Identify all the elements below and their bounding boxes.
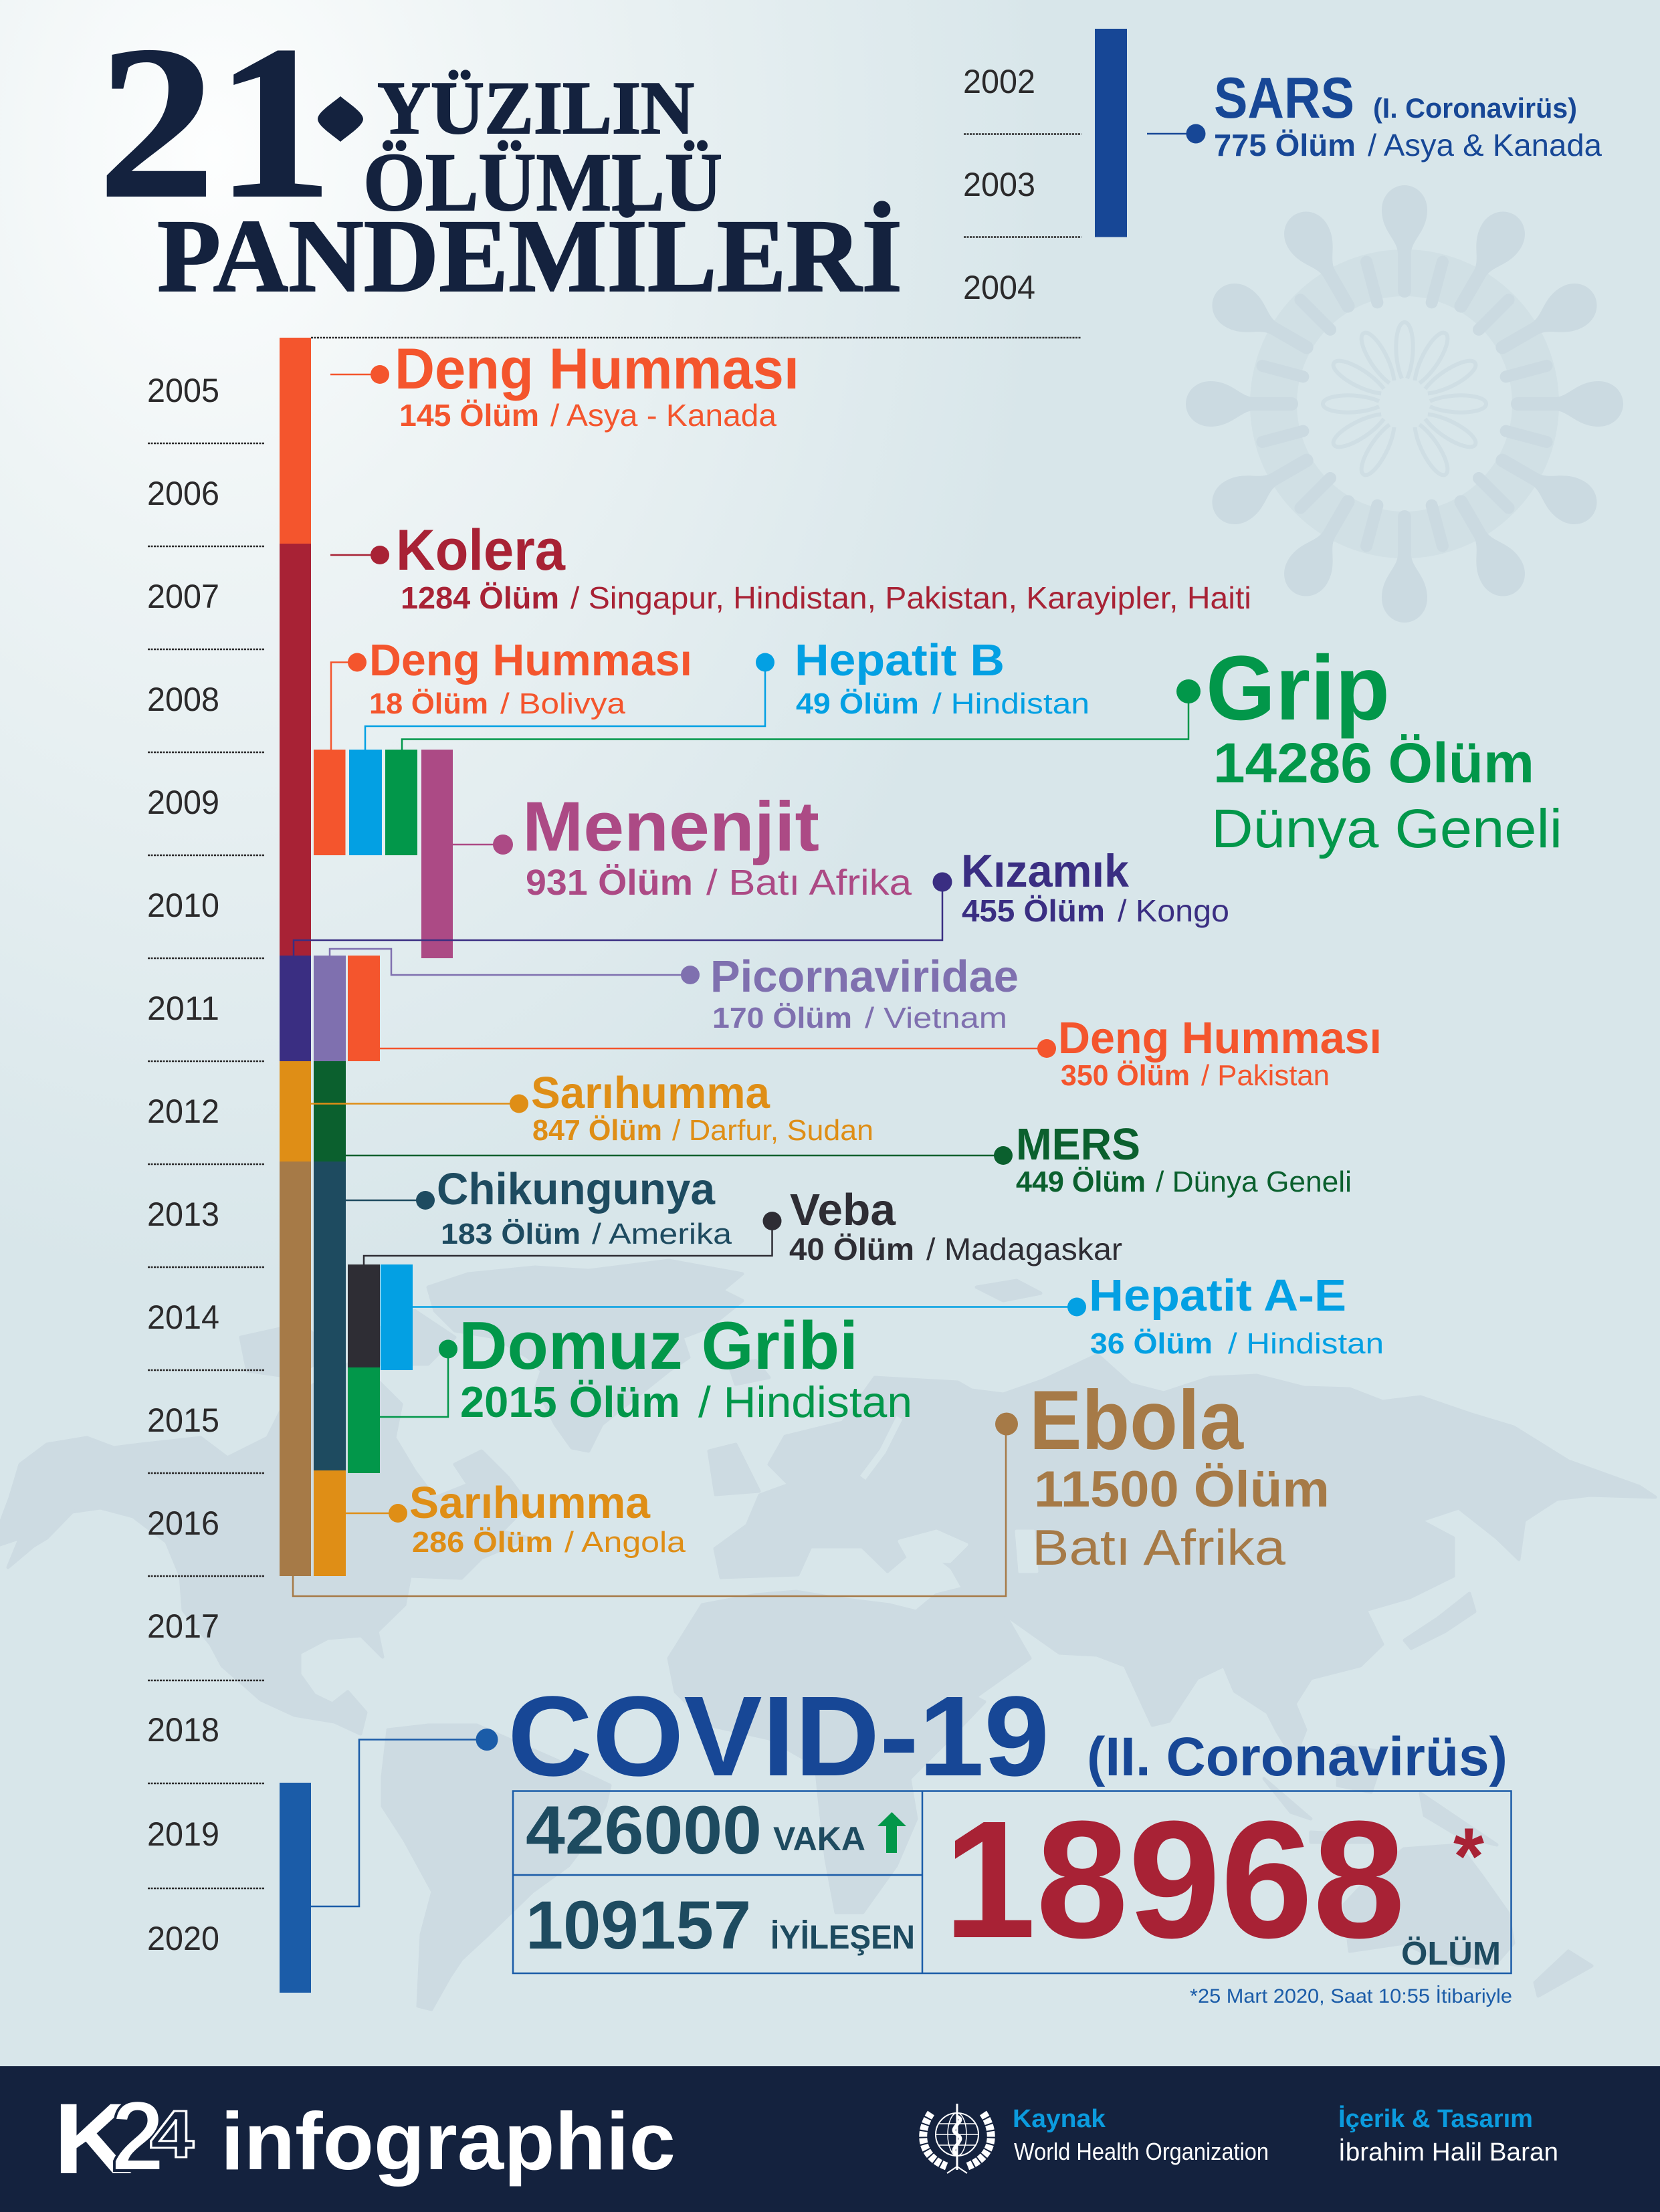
- design credit: İbrahim Halil Baran: [1338, 2138, 1558, 2167]
- footer wordmark: infographic: [221, 2096, 676, 2187]
- label: Sarihumma 2012: / Darfur, Sudan: [672, 1114, 873, 1147]
- title number 21: 21: [98, 1, 333, 243]
- label: Grip: Dünya Geneli: [1211, 798, 1562, 859]
- label: SARS: (I. Coronavirüs): [1373, 92, 1577, 124]
- label: Veba: / Madagaskar: [926, 1232, 1122, 1266]
- label: Chikungunya: Chikungunya: [437, 1164, 716, 1214]
- label: Hepatit B: Hepatit B: [795, 635, 1005, 685]
- label: Menenjit: Menenjit: [522, 788, 819, 866]
- label: Hepatit A-E: / Hindistan: [1228, 1327, 1384, 1360]
- label: MERS: 449 Ölüm: [1016, 1166, 1146, 1198]
- year axis: 2007: [147, 578, 219, 615]
- label: Deng Hummasi 2008: [331, 635, 692, 750]
- year axis: 2013: [147, 1196, 219, 1233]
- label: Ebola: Ebola: [1029, 1374, 1244, 1467]
- background world map: [0, 1260, 1655, 2009]
- label: Sarihumma 2016: 286 Ölüm: [412, 1526, 553, 1559]
- label: Domuz Gribi: [380, 1309, 912, 1426]
- label: Deng Hummasi 2008: Deng Humması: [369, 635, 692, 685]
- year axis: 2011: [147, 990, 219, 1027]
- label: Picornaviridae: 170 Ölüm: [712, 1002, 852, 1034]
- source credit: [1013, 2105, 1269, 2165]
- year axis: [147, 63, 1081, 1957]
- label: Kolera: Kolera: [396, 518, 566, 582]
- year axis: 2006: [147, 475, 219, 512]
- label: Deng Hummasi 2008: 18 Ölüm: [369, 687, 488, 720]
- label: Hepatit A-E: Hepatit A-E: [1089, 1270, 1346, 1321]
- label: Chikungunya: / Amerika: [592, 1218, 732, 1250]
- stat: cases: [526, 1792, 865, 1868]
- stat: recovered: [526, 1887, 915, 1963]
- label: Picornaviridae: Picornaviridae: [710, 952, 1019, 1002]
- label: Hepatit A-E: 36 Ölüm: [1090, 1327, 1213, 1360]
- label: Hepatit A-E: [413, 1270, 1384, 1360]
- label: Deng Hummasi 2011: Deng Humması: [1058, 1013, 1382, 1063]
- year axis: 2008: [147, 681, 219, 718]
- label: Deng Hummasi 2005: / Asya - Kanada: [550, 398, 776, 433]
- footer logo K24: 4: [150, 2097, 194, 2172]
- label: Menenjit: / Batı Afrika: [706, 863, 912, 903]
- year axis: 2018: [147, 1711, 219, 1749]
- design credit: [1338, 2105, 1558, 2167]
- year axis: 2019: [147, 1815, 219, 1853]
- footer logo K24: K: [54, 2082, 132, 2195]
- label: Grip: 14286 Ölüm: [1213, 732, 1534, 794]
- label: SARS: SARS: [1214, 66, 1354, 130]
- label: Grip: [402, 637, 1562, 859]
- title line 2: ÖLÜMLÜ: [363, 136, 722, 228]
- stat: deaths: ÖLÜM: [1401, 1936, 1501, 1972]
- footer logo K24: 2: [111, 2080, 165, 2192]
- year axis: 2005: [147, 372, 219, 409]
- COVID-19 stats table: [513, 1786, 1512, 1973]
- source credit: World Health Organization: [1014, 2138, 1269, 2165]
- year axis: 2016: [147, 1505, 219, 1542]
- label: Deng Hummasi 2011: [380, 1013, 1382, 1092]
- year axis: 2012: [147, 1093, 219, 1130]
- label: Sarihumma 2016: [346, 1478, 686, 1559]
- stat: deaths: 18968: [944, 1786, 1405, 1973]
- COVID-19 heading: (II. Coronavirüs): [1087, 1727, 1508, 1787]
- label: Deng Hummasi 2005: Deng Humması: [395, 337, 799, 401]
- label: SARS: / Asya & Kanada: [1368, 128, 1602, 162]
- label: Hepatit B: [365, 635, 1090, 750]
- source credit: Kaynak: [1013, 2105, 1106, 2133]
- label: SARS: [1147, 66, 1602, 162]
- label: Hepatit B: 49 Ölüm: [796, 687, 919, 720]
- label: Kizamik: 455 Ölüm: [962, 893, 1105, 928]
- COVID-19 heading: COVID-19: [508, 1673, 1049, 1800]
- title ordinal dot: [318, 96, 363, 142]
- label: Domuz Gribi: 2015 Ölüm: [460, 1377, 680, 1426]
- label: MERS: / Dünya Geneli: [1156, 1166, 1352, 1198]
- label: Sarihumma 2012: [311, 1068, 873, 1147]
- label: Menenjit: [453, 788, 912, 903]
- year axis: 2004: [963, 269, 1035, 306]
- year axis: 2002: [963, 63, 1035, 100]
- year axis: 2014: [147, 1299, 219, 1336]
- label: Ebola: 11500 Ölüm: [1034, 1461, 1330, 1518]
- year axis: 2017: [147, 1608, 219, 1645]
- title: [98, 1, 902, 314]
- label: Deng Hummasi 2008: / Bolivya: [500, 687, 626, 720]
- year axis: 2003: [963, 166, 1035, 203]
- label: Veba: [364, 1185, 1122, 1266]
- label: Hepatit B: / Hindistan: [932, 687, 1090, 720]
- footer band: [0, 2066, 1660, 2212]
- stat: deaths: *: [1453, 1811, 1484, 1901]
- footnote: *25 Mart 2020, Saat 10:55 İtibariyle: [1190, 1985, 1512, 2007]
- label: MERS: [346, 1119, 1352, 1198]
- label: Sarihumma 2016: Sarıhumma: [409, 1478, 651, 1528]
- design credit: İçerik & Tasarım: [1338, 2105, 1533, 2133]
- label: Menenjit: 931 Ölüm: [526, 863, 693, 903]
- label: MERS: MERS: [1016, 1119, 1140, 1170]
- label: Kolera: / Singapur, Hindistan, Pakistan, Karayipler, Haiti: [570, 580, 1251, 615]
- label: Chikungunya: [346, 1164, 732, 1250]
- label: Ebola: Batı Afrika: [1032, 1519, 1285, 1575]
- label: Kizamik: / Kongo: [1118, 893, 1229, 928]
- label: Kizamik: [294, 845, 1229, 956]
- stat: cases: VAKA: [773, 1820, 865, 1858]
- icon: WHO emblem: [923, 2104, 991, 2173]
- stat: recovered: İYİLEŞEN: [770, 1918, 915, 1956]
- year axis: 2010: [147, 887, 219, 924]
- title line 1: YÜZILIN: [377, 67, 694, 150]
- label: Deng Hummasi 2005: 145 Ölüm: [399, 398, 539, 433]
- label: Deng Hummasi 2011: / Pakistan: [1201, 1059, 1330, 1092]
- label: Sarihumma 2012: 847 Ölüm: [532, 1114, 662, 1147]
- label: Picornaviridae: [330, 949, 1019, 1034]
- timeline bars: [280, 29, 1127, 1993]
- label: Kolera: 1284 Ölüm: [401, 580, 559, 615]
- year axis: 2020: [147, 1920, 219, 1957]
- label: Kizamik: Kızamık: [961, 845, 1130, 897]
- label: Sarihumma 2012: Sarıhumma: [531, 1068, 770, 1118]
- label: SARS: 775 Ölüm: [1214, 128, 1356, 162]
- background virus illustration: [1186, 185, 1623, 623]
- label: Picornaviridae: / Vietnam: [865, 1002, 1007, 1034]
- footer logo K24: [54, 2080, 194, 2195]
- year axis: 2015: [147, 1402, 219, 1439]
- label: Veba: Veba: [790, 1185, 896, 1235]
- label: Deng Hummasi 2011: 350 Ölüm: [1061, 1059, 1190, 1092]
- stat: cases: 426000: [526, 1792, 762, 1868]
- label: Ebola: [293, 1374, 1330, 1596]
- title line 3: PANDEMİLERİ: [157, 198, 902, 314]
- label: Veba: 40 Ölüm: [789, 1232, 914, 1266]
- year axis: 2009: [147, 784, 219, 821]
- label: Domuz Gribi: / Hindistan: [698, 1377, 912, 1426]
- label: Chikungunya: 183 Ölüm: [441, 1218, 581, 1250]
- stat: recovered: 109157: [526, 1887, 751, 1963]
- label: Sarihumma 2016: / Angola: [564, 1526, 686, 1559]
- icon: up arrow: [877, 1812, 906, 1853]
- label: Deng Hummasi 2005: [330, 337, 799, 433]
- label: Domuz Gribi: Domuz Gribi: [459, 1309, 858, 1384]
- COVID-19 heading: [311, 1673, 1508, 1906]
- label: Grip: Grip: [1206, 637, 1390, 740]
- label: Kolera: [330, 518, 1251, 615]
